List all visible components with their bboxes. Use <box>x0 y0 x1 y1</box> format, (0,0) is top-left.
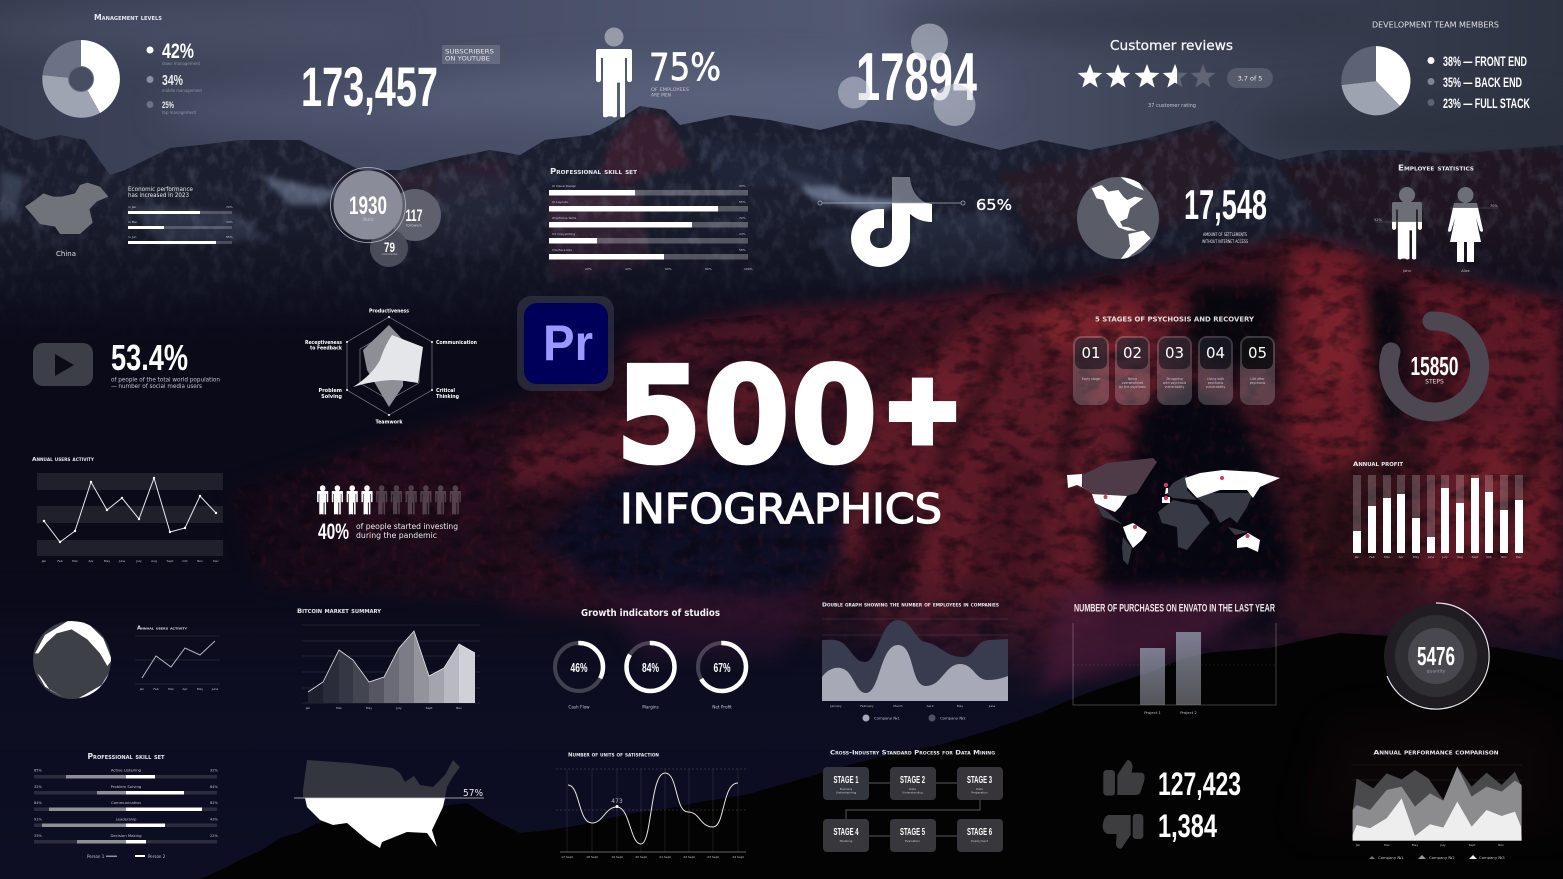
stat: YouTube subscribers: 173,457 <box>301 55 438 118</box>
card 03: 03 <box>1165 344 1184 362</box>
panel: annual profit bar chart: May <box>1413 555 1419 559</box>
stat: 17894 with bubbles: 17894 <box>856 39 977 115</box>
panel: number of units of satisfaction: 24 Sept <box>732 855 745 859</box>
subtitle: INFOGRAPHICS: INFOGRAPHICS <box>620 485 942 533</box>
stat: 75% of employees are men <box>596 28 721 117</box>
panel: bitcoin market summary: May <box>366 706 372 710</box>
bars: Wireframe Skills <box>552 216 577 220</box>
bars: 72% <box>739 216 746 220</box>
chart bands <box>37 473 223 556</box>
panel: professional skill set comparison: 33% <box>34 834 42 838</box>
panel: annual profit bar chart: Dec <box>1516 555 1522 559</box>
heading: Annual users activity <box>32 457 94 463</box>
title: 500+: + <box>888 345 957 477</box>
stage 3 <box>957 767 1003 800</box>
radial gauge: 5476 quantity: quantity <box>1427 668 1446 674</box>
panel: number of units of satisfaction: 20 Sept <box>635 855 648 859</box>
heading: Annual users activity <box>137 626 188 632</box>
bars <box>1140 632 1201 705</box>
panel: professional skill set comparison: 32% <box>210 768 218 772</box>
panel: 5 stages of psychosis and recovery <box>1073 316 1275 405</box>
icon: Adobe Premiere Pro tile <box>517 296 614 391</box>
legend: middle management <box>162 88 202 94</box>
card 05 <box>1240 336 1275 405</box>
radial gauge: 5476 quantity <box>1384 603 1489 709</box>
panel: bitcoin market summary: Mar <box>336 706 343 710</box>
legend: down management <box>162 61 200 67</box>
card 03: with psychosis <box>1163 381 1186 385</box>
heading: Annual performance comparison <box>1374 748 1498 756</box>
panel: China economic performance <box>25 183 233 258</box>
icon: man John: John <box>1402 269 1411 273</box>
panel: bitcoin market summary <box>297 607 480 710</box>
stage 2: STAGE 2 <box>900 775 925 786</box>
rating pill: 3,7 of 5 <box>1238 74 1262 82</box>
bars: 85% <box>739 200 746 204</box>
legend: 34% <box>162 72 183 89</box>
panel: likes and dislikes <box>1103 760 1241 849</box>
heading: DEVELOPMENT TEAM MEMBERS <box>1372 20 1499 30</box>
panel: double graph employees: March <box>893 704 903 708</box>
icon: thumbs down <box>1103 814 1143 849</box>
panel: social bubbles: followers <box>406 224 422 228</box>
title: 500+: 500 <box>615 338 878 494</box>
legend <box>1369 855 1505 860</box>
progress bars: in Mar <box>128 220 138 224</box>
panel: double graph employees <box>822 602 1008 722</box>
icon: thumbs up <box>1103 760 1145 796</box>
panel: annual profit bar chart: Apr <box>1398 555 1404 559</box>
panel: professional skill set comparison: 22% <box>210 834 218 838</box>
panel: professional skill set comparison: Active Listening <box>111 768 142 772</box>
panel: annual users activity line chart: Apr <box>88 559 94 563</box>
icon: woman Alice: Alice <box>1461 269 1470 273</box>
panel: bitcoin market summary: Sept <box>426 706 433 710</box>
card 02 <box>1115 336 1150 405</box>
panel: annual profit bar chart: Oct <box>1486 555 1492 559</box>
panel: annual users activity line chart: Dec <box>213 559 219 563</box>
panel: social media users: — number of social media users <box>111 384 202 390</box>
panel: double graph employees: February <box>860 704 874 708</box>
stage 3: Data <box>976 787 983 791</box>
bars: 60% <box>665 267 672 271</box>
panel: number of units of satisfaction: 22 Sept <box>683 855 696 859</box>
panel: management levels <box>42 13 202 118</box>
card 04 <box>1198 336 1233 405</box>
panel: 40% of people investing <box>317 485 461 544</box>
panel: bitcoin market summary: July <box>395 706 402 710</box>
legend: Company №3 <box>1479 855 1505 860</box>
panel: settlements globe: WITHOUT INTERNET ACCESS <box>1202 239 1248 245</box>
progress bars: 70% <box>226 205 233 209</box>
stage 4: STAGE 4 <box>834 827 859 838</box>
panel: double graph employees: June <box>988 704 995 708</box>
legend: top management <box>162 110 196 116</box>
panel: professional skill set comparison: Communication <box>111 800 142 805</box>
panel: development team members <box>1341 20 1530 115</box>
panel: social media users <box>33 337 220 390</box>
bars: UI Visual Design <box>552 184 576 188</box>
legend: 42% <box>162 40 194 63</box>
line series <box>43 477 217 543</box>
panel: small annual users activity chart: June <box>211 687 218 691</box>
legend <box>87 854 166 859</box>
card 02: Being <box>1128 377 1137 381</box>
panel: settlements globe: 17,548 <box>1184 181 1267 228</box>
panel: social bubbles: 1930 <box>349 192 387 220</box>
bars: 100% <box>744 267 753 271</box>
bars: Interface Kits <box>552 248 572 252</box>
panel: growth indicators of studios <box>555 608 746 710</box>
panel: annual users activity line chart: Aug <box>151 559 157 563</box>
panel: small annual users activity chart: May <box>197 687 203 691</box>
panel: annual profit bar chart: Sept <box>1472 555 1479 559</box>
card 01: Early stage <box>1082 377 1100 381</box>
stage 2: Data <box>909 787 916 791</box>
panel: social media users: 53.4% <box>111 337 188 378</box>
panel: social bubbles <box>330 168 441 267</box>
ring: cash flow: Cash Flow <box>568 704 590 710</box>
bars <box>549 184 753 271</box>
bars: 24% <box>739 232 746 236</box>
stage 1: Understanding <box>836 790 857 794</box>
star rating <box>1078 64 1215 88</box>
panel: settlements globe <box>1077 177 1267 259</box>
progress bars: 34% <box>226 220 233 224</box>
radial gauge: 15850 steps: 15850 <box>1410 351 1458 381</box>
stage 1: Business <box>840 787 853 791</box>
legend: 35% — BACK END <box>1443 74 1522 90</box>
panel: number of units of satisfaction: 19 Sept <box>611 855 624 859</box>
card 02: 02 <box>1123 344 1142 362</box>
heading: Double graph showing the number of employees in companies <box>822 602 999 608</box>
panel: annual users activity line chart: June <box>118 559 125 563</box>
card 01: 01 <box>1081 344 1101 362</box>
ring: cash flow <box>555 643 603 710</box>
panel: annual users activity line chart: Mar <box>72 559 79 563</box>
panel: annual performance comparison: Nov <box>1498 843 1504 847</box>
panel: annual users activity line chart <box>32 457 223 563</box>
ring: margins <box>626 643 674 710</box>
panel: annual users activity line chart: Nov <box>197 559 203 563</box>
legend: Company №1 <box>874 716 900 720</box>
panel: professional skill set comparison: 32% <box>34 785 42 789</box>
panel: annual users activity line chart: July <box>135 559 142 563</box>
heading: Professional skill set <box>550 167 638 176</box>
stat: 17894 with bubbles <box>838 24 977 126</box>
panel: annual users activity line chart: Feb <box>57 559 63 563</box>
panel: small annual users activity chart: Jan <box>139 687 144 691</box>
panel: small annual users activity chart: Apr <box>182 687 188 691</box>
panel: social media users: of people of the total world population <box>111 378 220 384</box>
radar chart: Critical <box>436 388 455 394</box>
badge <box>442 45 500 64</box>
stat: 75% of employees are men: OF EMPLOYEES <box>651 87 689 93</box>
panel: annual users activity line chart: Sept <box>167 559 174 563</box>
panel: customer reviews: 37 customer rating <box>1148 103 1196 109</box>
panel: double graph employees: January <box>829 704 842 708</box>
map: USA 57% <box>294 760 484 848</box>
pictogram row <box>317 485 461 514</box>
panel: settlements globe: AMOUNT OF SETTLEMENTS <box>1203 232 1247 238</box>
badge: SUBSCRIBERS <box>445 48 494 56</box>
map: USA 57%: 57% <box>463 788 483 799</box>
rating pill <box>1227 68 1273 88</box>
radial gauge: 5476 quantity: 5476 <box>1417 641 1455 671</box>
panel: number of units of satisfaction: 23 Sept <box>707 855 720 859</box>
ring: cash flow: 46% <box>570 660 588 675</box>
icon: TikTok note <box>851 177 932 267</box>
stage 6 <box>957 819 1003 852</box>
stat: 75% of employees are men: 75% <box>649 46 721 89</box>
panel: bitcoin market summary: Nov <box>456 706 462 710</box>
panel: purchases on Envato: Project 1 <box>1144 710 1161 715</box>
card 04: vulnerability <box>1206 385 1226 389</box>
panel: annual performance comparison: Jan <box>1355 843 1360 847</box>
area charts <box>822 620 1008 701</box>
panel: bitcoin market summary: Jan <box>305 706 310 710</box>
panel: TikTok 65%: 65% <box>976 196 1012 214</box>
stage 3: STAGE 3 <box>967 775 992 786</box>
panel: professional skill set comparison: Problem Solving <box>111 784 142 789</box>
panel: small annual users activity chart: Mar <box>168 687 175 691</box>
panel: annual profit bar chart: Feb <box>1369 555 1375 559</box>
bars: 58% <box>739 248 746 252</box>
panel: professional skill set comparison: 84% <box>34 801 42 805</box>
panel: 40% of people investing: 40% <box>318 519 349 544</box>
heading: Employee statistics <box>1398 164 1474 172</box>
stat: 75% of employees are men: ARE MEN <box>651 92 671 98</box>
heading: Bitcoin market summary <box>297 607 381 615</box>
progress line <box>818 201 965 205</box>
card 02: overwhelmed <box>1122 381 1143 385</box>
panel: employee statistics <box>1374 164 1498 273</box>
stage 2: Understanding <box>902 790 923 794</box>
radial gauge: 15850 steps <box>1389 321 1480 412</box>
progress bars: 85% <box>226 235 233 239</box>
panel: likes and dislikes: 127,423 <box>1158 766 1241 802</box>
stage 4: Modeling <box>840 839 853 843</box>
panel: annual performance comparison: July <box>1439 843 1446 847</box>
stage 5: STAGE 5 <box>900 827 925 838</box>
bars: UI Layouts <box>552 200 568 204</box>
panel: professional skill set bars <box>549 167 753 271</box>
panel: small annual users activity chart <box>135 626 220 691</box>
panel: number of units of satisfaction: 473 <box>611 798 623 805</box>
progress bars <box>128 205 233 244</box>
card 05: 05 <box>1248 344 1267 362</box>
icon: man John: 52% <box>1374 218 1382 222</box>
connectors <box>846 783 980 836</box>
panel: annual profit bar chart: Mar <box>1384 555 1391 559</box>
panel: customer reviews <box>1078 39 1273 109</box>
panel: professional skill set comparison: Decision Making <box>110 833 142 838</box>
stage 2 <box>890 767 936 800</box>
legend: Person 2 <box>148 854 166 859</box>
stage 1 <box>823 767 869 800</box>
pie chart <box>1341 46 1411 115</box>
panel: annual profit bar chart: Nov <box>1501 555 1507 559</box>
panel: annual performance comparison: Sept <box>1469 843 1476 847</box>
heading: Professional skill set <box>88 752 165 761</box>
radar chart: Receptiveness <box>305 340 342 346</box>
card 04: Living with <box>1207 377 1224 381</box>
panel: annual performance comparison <box>1352 748 1522 860</box>
card 03: Struggling <box>1166 377 1183 381</box>
ring: net profit: 67% <box>714 660 731 675</box>
panel: annual users activity line chart: May <box>104 559 110 563</box>
card 03 <box>1157 336 1192 405</box>
panel: professional skill set comparison <box>34 752 218 859</box>
panel: double graph employees: April <box>927 704 934 708</box>
panel: China economic performance: China <box>56 250 76 258</box>
ring: net profit <box>698 643 746 710</box>
icon: woman Alice <box>1448 187 1498 273</box>
panel: professional skill set comparison: Leadership <box>116 816 137 822</box>
panel: China economic performance: has increased in 2023 <box>128 193 189 199</box>
panel: annual profit bar chart: Jan <box>1354 555 1359 559</box>
legend: Company №2 <box>1429 855 1455 860</box>
legend: Person 1 <box>87 854 105 859</box>
icon: dark globe <box>33 621 113 699</box>
legend: Company №2 <box>940 716 966 720</box>
panel: annual profit bar chart: July <box>1441 555 1448 559</box>
icon: man John <box>1374 187 1422 273</box>
panel: purchases on Envato: Project 2 <box>1180 710 1197 715</box>
panel: annual users activity line chart: Oct <box>182 559 188 563</box>
panel: 40% of people investing: during the pandemic <box>356 531 437 540</box>
heading: Cross-Industry Standard Process for Data Mining <box>830 750 995 756</box>
panel: social bubbles: likes <box>362 217 374 223</box>
stage 4 <box>823 819 869 852</box>
radar chart: Teamwork <box>376 420 403 426</box>
donut chart <box>42 40 120 118</box>
legend <box>1428 53 1530 111</box>
panel: professional skill set comparison: 91% <box>34 818 42 822</box>
card 04: psychosis <box>1208 381 1224 385</box>
map: China <box>25 183 108 234</box>
stage 6: Deployment <box>971 839 989 843</box>
panel: number of units of satisfaction: 21 Sept <box>659 855 672 859</box>
icon: woman Alice: 70% <box>1490 204 1498 208</box>
card 05: psychosis <box>1250 381 1266 385</box>
heading: Customer reviews <box>1110 39 1233 54</box>
heading: Growth indicators of studios <box>581 608 720 619</box>
legend <box>146 40 202 116</box>
panel: professional skill set comparison: 82% <box>210 801 218 805</box>
progress bars: in Jan <box>128 205 136 209</box>
panel: annual profit bar chart: Aug <box>1457 555 1463 559</box>
radar chart <box>305 308 477 426</box>
panel: social bubbles: comments <box>382 252 398 256</box>
panel: small annual users activity chart: Feb <box>153 687 159 691</box>
radial gauge: 15850 steps: STEPS <box>1425 378 1444 386</box>
panel: likes and dislikes: 1,384 <box>1158 808 1217 844</box>
heading: 5 STAGES OF PSYCHOSIS AND RECOVERY <box>1095 316 1255 324</box>
stage 6: STAGE 6 <box>967 827 992 838</box>
card 04: 04 <box>1206 344 1225 362</box>
area series <box>1353 767 1522 841</box>
panel: professional skill set comparison: 43% <box>210 818 218 822</box>
panel: number of units of satisfaction <box>556 752 746 859</box>
radar chart: Productiveness <box>369 308 409 314</box>
stage 5: Evaluation <box>905 839 920 843</box>
icon: play button <box>33 343 93 386</box>
panel: annual profit bar chart <box>1353 460 1523 559</box>
ring: margins: 84% <box>642 660 659 675</box>
badge: ON YOUTUBE <box>445 56 490 62</box>
stage 5 <box>890 819 936 852</box>
panel: CRISP-DM process <box>823 750 1003 852</box>
card 02: by the psychosis <box>1119 385 1146 389</box>
panel: professional skill set comparison: 65% <box>34 768 42 772</box>
world map <box>1067 458 1280 565</box>
legend: Company №1 <box>1378 855 1404 860</box>
panel: annual profit bar chart: June <box>1427 555 1434 559</box>
ring: margins: Margins <box>642 704 659 710</box>
panel: number of units of satisfaction: 17 Sept <box>561 855 574 859</box>
stepped area <box>308 631 475 703</box>
legend: 25% <box>162 100 174 111</box>
card 03: vulnerability <box>1165 385 1185 389</box>
ring: net profit: Net Profit <box>712 704 732 710</box>
bars: 80% <box>705 267 712 271</box>
progress bars: in Jun <box>128 235 136 239</box>
heading: Economic performance <box>128 187 193 193</box>
legend <box>862 714 966 722</box>
radar chart: Solving <box>321 394 342 400</box>
heading: NUMBER OF PURCHASES ON ENVATO IN THE LAST YEAR <box>1074 602 1275 614</box>
bars: 43% <box>739 184 746 188</box>
panel: social bubbles: 79 <box>384 239 395 255</box>
radar chart: Thinking <box>436 394 459 400</box>
panel: social bubbles: 117 <box>406 206 422 225</box>
heading: Annual profit <box>1353 460 1404 468</box>
panel: 40% of people investing: of people started investing <box>356 522 458 531</box>
stage 3: Preparation <box>971 790 988 794</box>
bars: UX Copywriting <box>552 232 575 236</box>
panel: double graph employees: May <box>957 704 963 708</box>
icon: man <box>596 28 632 117</box>
stage 1: STAGE 1 <box>834 775 859 786</box>
panel: TikTok 65% <box>818 177 1012 267</box>
card 05: Life after <box>1250 377 1265 381</box>
heading: Number of units of satisfaction <box>568 752 659 758</box>
radar chart: to Feedback <box>310 346 343 352</box>
panel: annual performance comparison: May <box>1412 843 1418 847</box>
card 01 <box>1073 336 1109 405</box>
panel: annual performance comparison: Mar <box>1384 843 1391 847</box>
panel: annual users activity line chart: Jan <box>41 559 46 563</box>
title: Management levels <box>94 13 162 22</box>
bars: 40% <box>625 267 632 271</box>
icon: globe Americas <box>1077 177 1159 259</box>
panel: professional skill set comparison: 64% <box>210 785 218 789</box>
bars: 20% <box>585 267 592 271</box>
icon: Adobe Premiere Pro tile: Pr <box>543 315 593 371</box>
panel: purchases on Envato <box>1073 602 1276 715</box>
radar chart: Problem <box>319 388 342 394</box>
smooth line <box>568 773 738 844</box>
panel: number of units of satisfaction: 18 Sept <box>586 855 599 859</box>
radar chart: Communication <box>436 340 477 346</box>
